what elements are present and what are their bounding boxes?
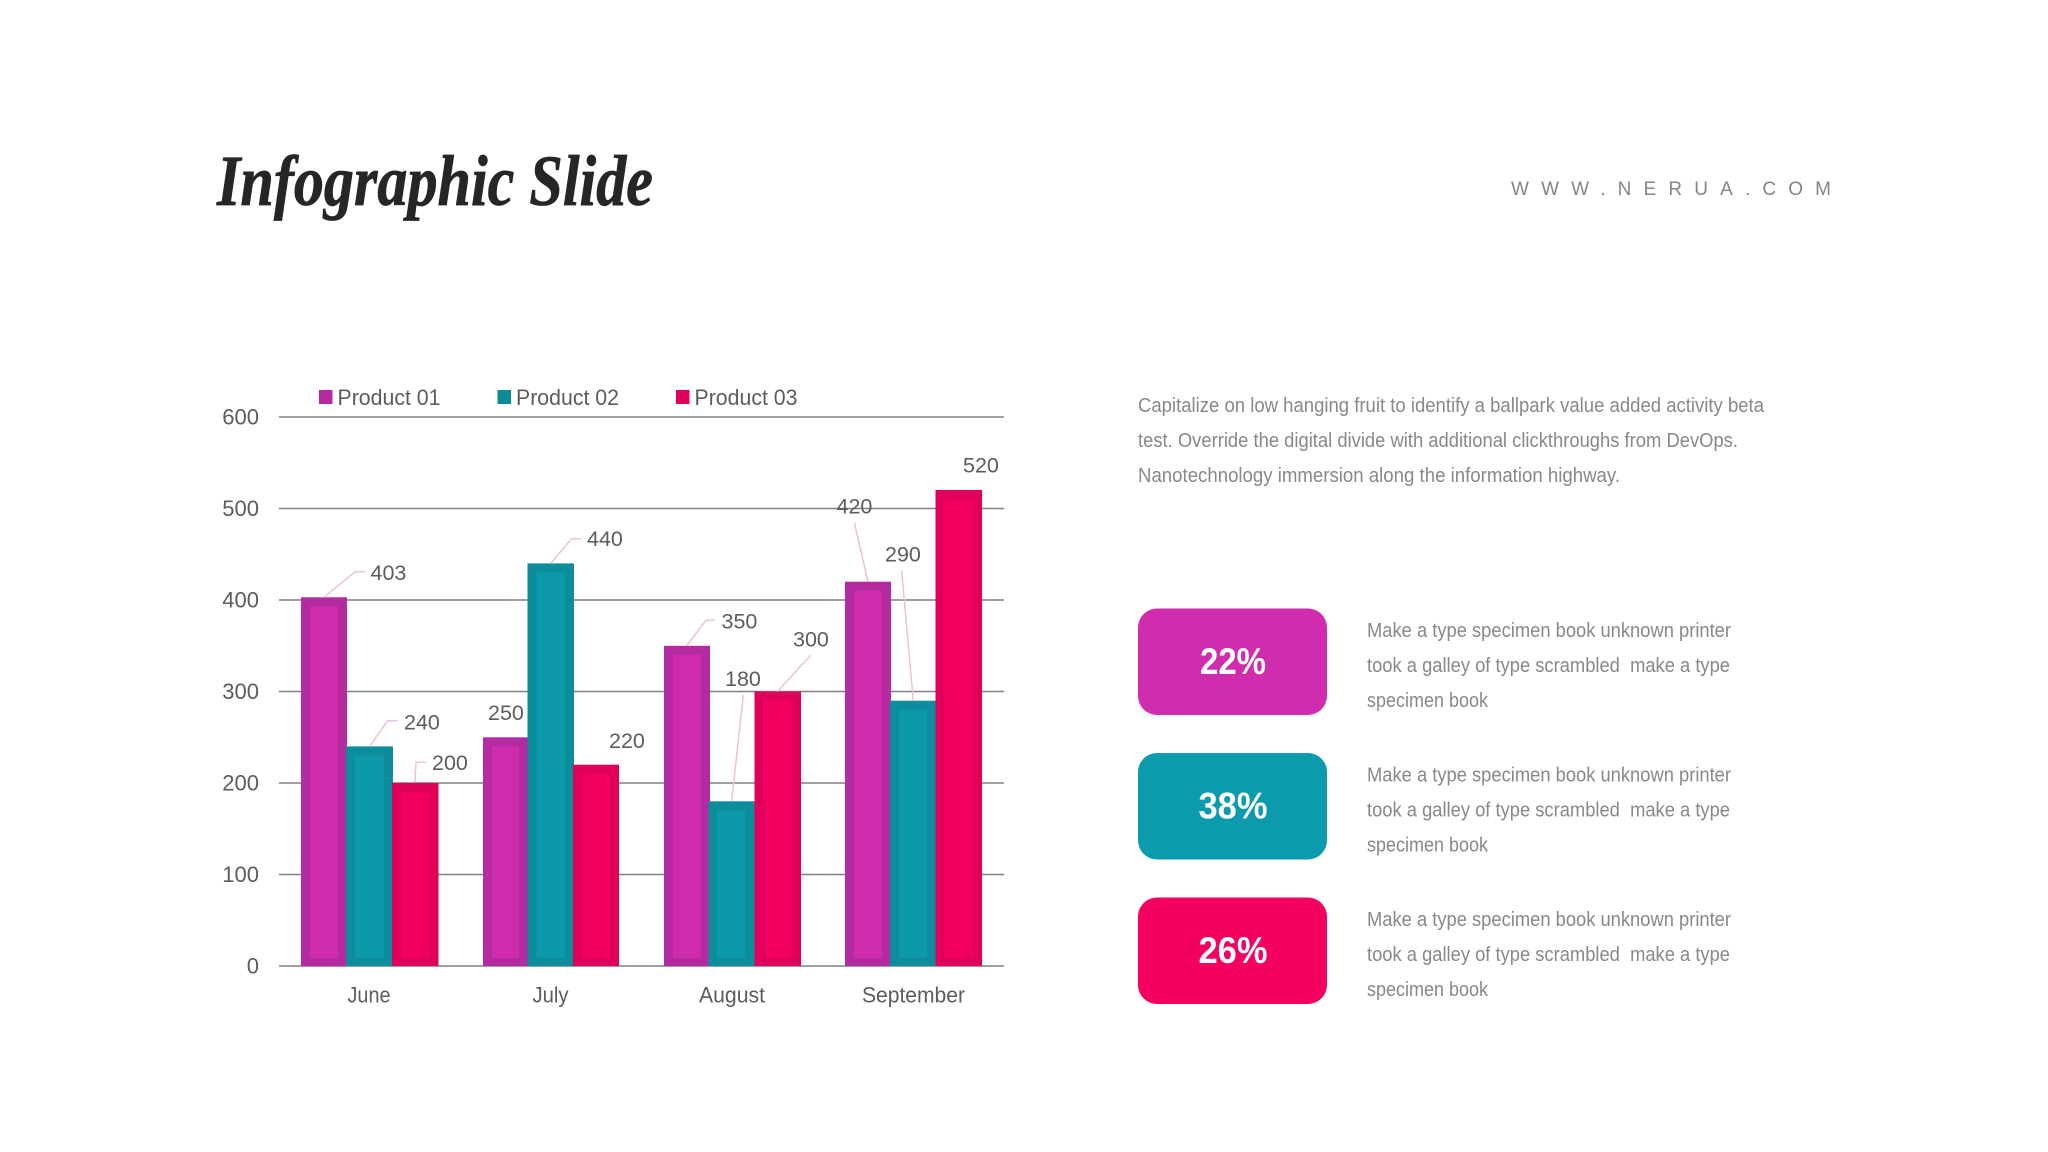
bar chart bbox=[222, 385, 1004, 1008]
intro paragraph bbox=[1138, 395, 1765, 487]
data labels: 300 bbox=[793, 628, 829, 652]
data labels: 220 bbox=[609, 729, 645, 753]
data labels: 290 bbox=[885, 543, 921, 567]
data labels: 420 bbox=[836, 494, 872, 518]
data labels: 180 bbox=[725, 667, 761, 691]
intro paragraph: Nanotechnology immersion along the information highway. bbox=[1138, 465, 1620, 487]
bars: September bbox=[845, 490, 982, 966]
y axis labels bbox=[222, 404, 259, 978]
bars: August bbox=[664, 646, 801, 966]
description: specimen book bbox=[1367, 690, 1489, 712]
intro paragraph: test. Override the digital divide with additional clickthroughs from DevOps. bbox=[1138, 430, 1738, 452]
value: 26% bbox=[1198, 930, 1268, 971]
data labels: 250 bbox=[488, 701, 524, 725]
x axis labels: September bbox=[862, 982, 965, 1008]
y axis labels: 100 bbox=[222, 862, 259, 887]
description: took a galley of type scrambled make a type bbox=[1367, 800, 1730, 822]
title: Infographic Slide bbox=[216, 141, 653, 221]
badge bbox=[1138, 608, 1327, 715]
x axis labels: August bbox=[699, 982, 765, 1008]
description: took a galley of type scrambled make a type bbox=[1367, 655, 1730, 677]
data labels: 520 bbox=[963, 454, 999, 478]
legend: Product 01 bbox=[338, 385, 440, 410]
website url: WWW.NERUA.COM bbox=[1511, 179, 1831, 200]
data labels bbox=[370, 454, 999, 775]
y axis labels: 300 bbox=[222, 679, 259, 704]
data labels: 240 bbox=[404, 710, 440, 734]
data labels: 350 bbox=[722, 610, 757, 634]
y axis labels: 400 bbox=[222, 588, 259, 612]
badge bbox=[1138, 898, 1327, 1004]
description bbox=[1367, 909, 1731, 1001]
intro paragraph: Capitalize on low hanging fruit to identify a ballpark value added activity beta bbox=[1138, 395, 1765, 417]
x axis labels bbox=[348, 982, 965, 1008]
value: 22% bbox=[1200, 641, 1266, 682]
description: Make a type specimen book unknown printer bbox=[1367, 909, 1731, 931]
stat row: 26% bbox=[1138, 898, 1731, 1004]
stat row: 22% bbox=[1138, 608, 1731, 715]
data labels: 200 bbox=[432, 751, 468, 775]
bars: June bbox=[301, 597, 438, 966]
y axis labels: 0 bbox=[247, 954, 259, 978]
y axis labels: 200 bbox=[222, 770, 259, 796]
legend bbox=[319, 385, 798, 410]
badge bbox=[1138, 753, 1327, 860]
data labels: 440 bbox=[587, 527, 623, 551]
legend: Product 03 bbox=[694, 385, 798, 410]
description: specimen book bbox=[1367, 834, 1489, 856]
leader lines bbox=[324, 523, 913, 801]
legend: Product 02 bbox=[516, 385, 619, 410]
description: took a galley of type scrambled make a type bbox=[1367, 944, 1730, 966]
description bbox=[1367, 620, 1731, 712]
description: specimen book bbox=[1367, 979, 1489, 1001]
value: 38% bbox=[1198, 786, 1268, 826]
data labels: 403 bbox=[370, 561, 406, 585]
description: Make a type specimen book unknown printer bbox=[1367, 620, 1731, 642]
description: Make a type specimen book unknown printer bbox=[1367, 764, 1731, 786]
description bbox=[1367, 764, 1731, 856]
x axis labels: July bbox=[532, 982, 568, 1008]
stat row: 38% bbox=[1138, 753, 1731, 860]
x axis labels: June bbox=[348, 982, 390, 1008]
y axis labels: 500 bbox=[222, 496, 259, 521]
bars: July bbox=[483, 563, 619, 966]
y axis labels: 600 bbox=[222, 404, 259, 430]
